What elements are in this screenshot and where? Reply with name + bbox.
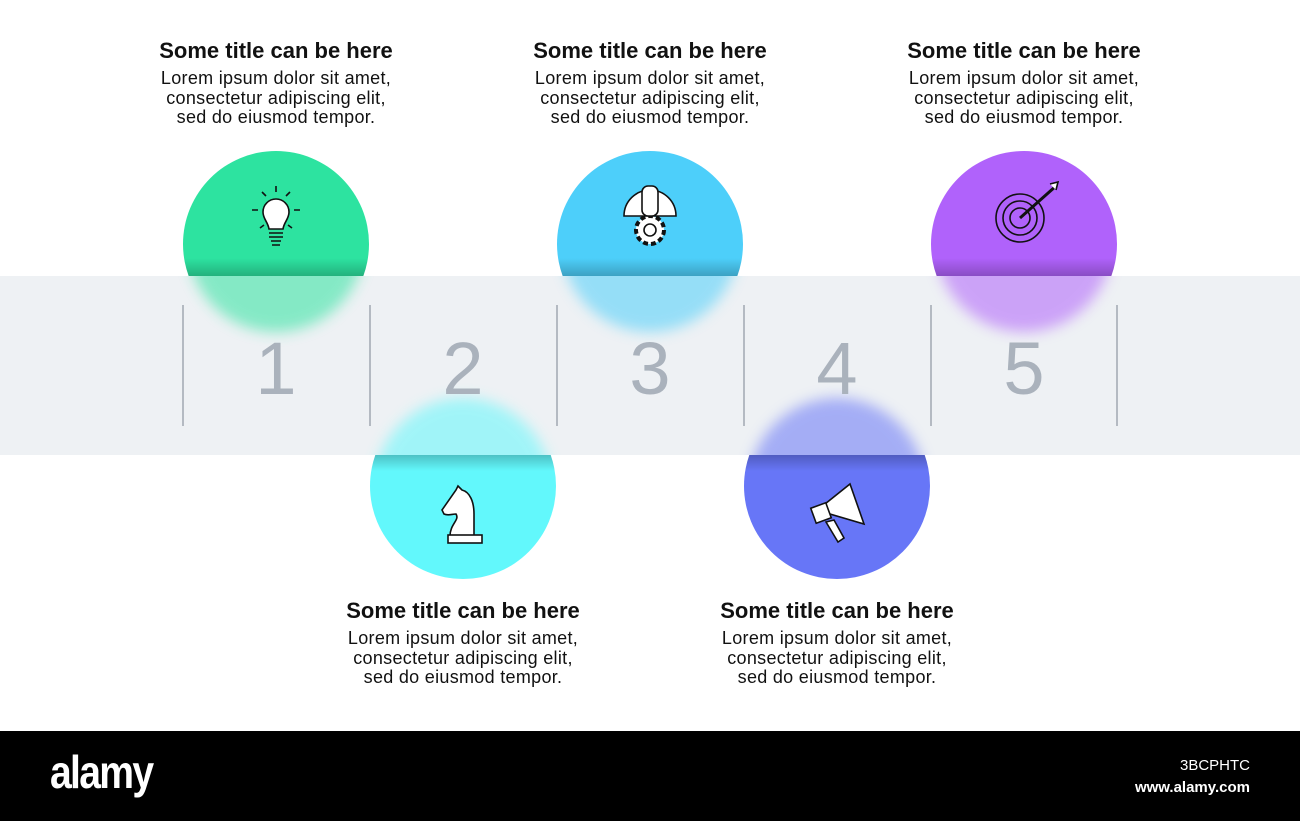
text: step 2 — [346, 598, 580, 687]
faded circle parts in band — [184, 276, 1114, 455]
main diagram — [0, 151, 1300, 579]
circle 4 — [744, 455, 930, 579]
circle 3 — [557, 151, 743, 276]
numbers: 4 — [816, 327, 858, 410]
icon: helmet gear — [624, 186, 676, 244]
text: step 5: sed do eiusmod tempor. — [925, 107, 1123, 127]
numbers: 5 — [1003, 327, 1045, 410]
text: step 5 — [907, 38, 1141, 127]
text: step 3: Some title can be here — [533, 38, 767, 63]
footer id: www.alamy.com — [1135, 779, 1250, 796]
icon: target — [996, 182, 1058, 242]
text: step 4: Lorem ipsum dolor sit amet, — [722, 628, 952, 648]
dividers — [183, 305, 1117, 426]
text: step 4: Some title can be here — [720, 598, 954, 623]
text: step 2: Some title can be here — [346, 598, 580, 623]
text: step 1: consectetur adipiscing elit, — [166, 88, 386, 108]
text: step 2: sed do eiusmod tempor. — [364, 667, 562, 687]
band — [0, 276, 1300, 455]
text: step 3: sed do eiusmod tempor. — [551, 107, 749, 127]
text: step 3: consectetur adipiscing elit, — [540, 88, 760, 108]
numbers: 1 — [255, 327, 297, 410]
icon: knight — [442, 486, 482, 543]
numbers: 2 — [442, 327, 484, 410]
circle 2 — [370, 455, 556, 579]
footer id — [1135, 757, 1250, 796]
text: step 1: Some title can be here — [159, 38, 393, 63]
footer — [0, 731, 1300, 821]
text: step 1: Lorem ipsum dolor sit amet, — [161, 68, 391, 88]
footer id: 3BCPHTC — [1180, 757, 1250, 774]
circle 5 — [931, 151, 1117, 276]
text: step 4 — [720, 598, 954, 687]
text: step 2: consectetur adipiscing elit, — [353, 648, 573, 668]
text: step 5: Some title can be here — [907, 38, 1141, 63]
footer logo: alamy — [50, 746, 152, 798]
text: step 2: Lorem ipsum dolor sit amet, — [348, 628, 578, 648]
text: step 3: Lorem ipsum dolor sit amet, — [535, 68, 765, 88]
numbers: 3 — [629, 327, 671, 410]
text: step 1 — [159, 38, 393, 127]
text: step 4: sed do eiusmod tempor. — [738, 667, 936, 687]
text: step 4: consectetur adipiscing elit, — [727, 648, 947, 668]
text: step 3 — [533, 38, 767, 127]
icon: megaphone — [811, 484, 864, 542]
icon: light bulb — [252, 186, 300, 245]
numbers — [255, 327, 1045, 410]
text: step 1: sed do eiusmod tempor. — [177, 107, 375, 127]
circle 1 — [183, 151, 369, 276]
text: step 5: consectetur adipiscing elit, — [914, 88, 1134, 108]
text: step 5: Lorem ipsum dolor sit amet, — [909, 68, 1139, 88]
